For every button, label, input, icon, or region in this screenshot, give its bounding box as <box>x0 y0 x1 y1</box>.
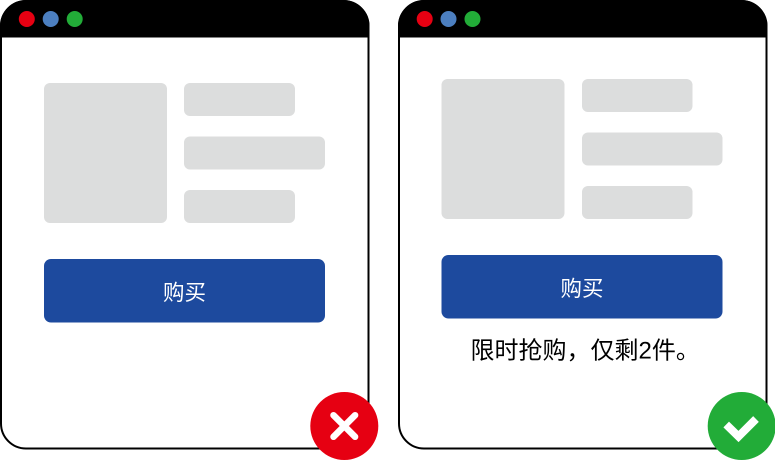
icon: red cross badge <box>310 392 378 460</box>
window frame <box>1 1 368 448</box>
buy button <box>44 259 325 322</box>
buy button: 购买 <box>560 277 604 301</box>
urgency message: 限时抢购，仅剩2件。 <box>470 338 700 364</box>
title bar <box>398 0 768 38</box>
panel: bad example window <box>0 0 370 448</box>
icon: green check badge <box>708 392 775 460</box>
window buttons <box>19 11 83 27</box>
text placeholder lines <box>184 83 325 223</box>
image placeholder <box>442 79 564 219</box>
text placeholder lines <box>582 79 722 219</box>
buy button <box>442 255 722 318</box>
title bar <box>0 0 370 38</box>
window frame <box>399 1 766 448</box>
image placeholder <box>44 83 167 223</box>
panel: good example window <box>398 0 768 448</box>
buy button: 购买 <box>163 281 206 305</box>
window buttons <box>417 11 480 27</box>
